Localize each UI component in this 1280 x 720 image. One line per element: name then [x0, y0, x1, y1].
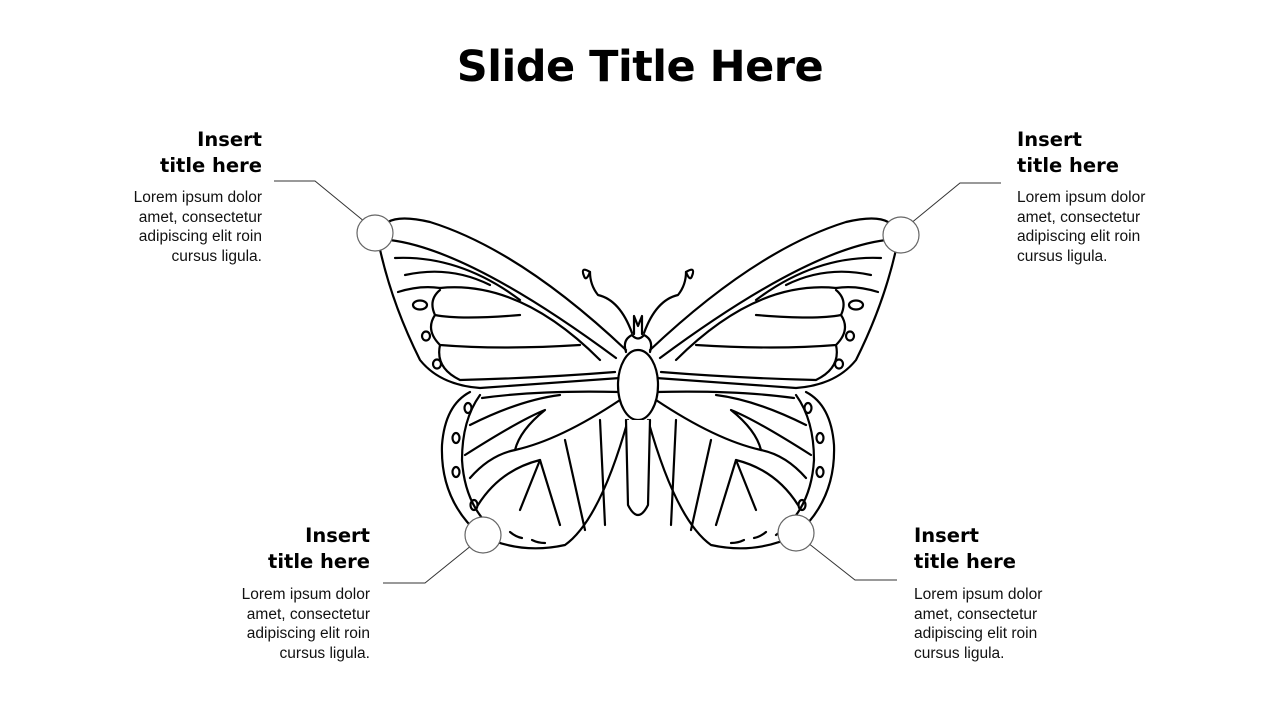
- text block: top left: cursus ligula.: [172, 248, 262, 265]
- text block: top left: Insert: [197, 128, 262, 151]
- text block: bottom left: [242, 524, 370, 662]
- connector lines: [274, 181, 1001, 583]
- text block: bottom left: Insert: [305, 524, 370, 547]
- text block: top right: Insert: [1017, 128, 1082, 151]
- text block: bottom left: Lorem ipsum dolor: [242, 586, 370, 603]
- text block: bottom right: [914, 524, 1042, 662]
- text block: bottom left: title here: [268, 550, 370, 573]
- text block: top right: [1017, 128, 1146, 265]
- text block: bottom left: amet, consectetur: [247, 606, 370, 623]
- text block: top left: title here: [160, 154, 262, 177]
- text block: top left: adipiscing elit roin: [139, 228, 262, 245]
- text block: top left: amet, consectetur: [139, 209, 262, 226]
- text block: top right: title here: [1017, 154, 1119, 177]
- text block: bottom right: Lorem ipsum dolor: [914, 586, 1042, 603]
- title: Slide Title Here: [457, 42, 823, 92]
- text block: top right: Lorem ipsum dolor: [1017, 189, 1145, 206]
- butterfly: [378, 218, 898, 548]
- text block: bottom right: amet, consectetur: [914, 606, 1037, 623]
- text block: bottom right: Insert: [914, 524, 979, 547]
- text block: bottom right: adipiscing elit roin: [914, 625, 1037, 642]
- text block: bottom left: cursus ligula.: [280, 645, 370, 662]
- text block: bottom right: title here: [914, 550, 1016, 573]
- text block: top left: Lorem ipsum dolor: [134, 189, 262, 206]
- text block: top right: adipiscing elit roin: [1017, 228, 1140, 245]
- text block: bottom right: cursus ligula.: [914, 645, 1004, 662]
- markers: [357, 215, 919, 553]
- text block: bottom left: adipiscing elit roin: [247, 625, 370, 642]
- text block: top right: cursus ligula.: [1017, 248, 1107, 265]
- text block: top right: amet, consectetur: [1017, 209, 1140, 226]
- text block: top left: [134, 128, 262, 265]
